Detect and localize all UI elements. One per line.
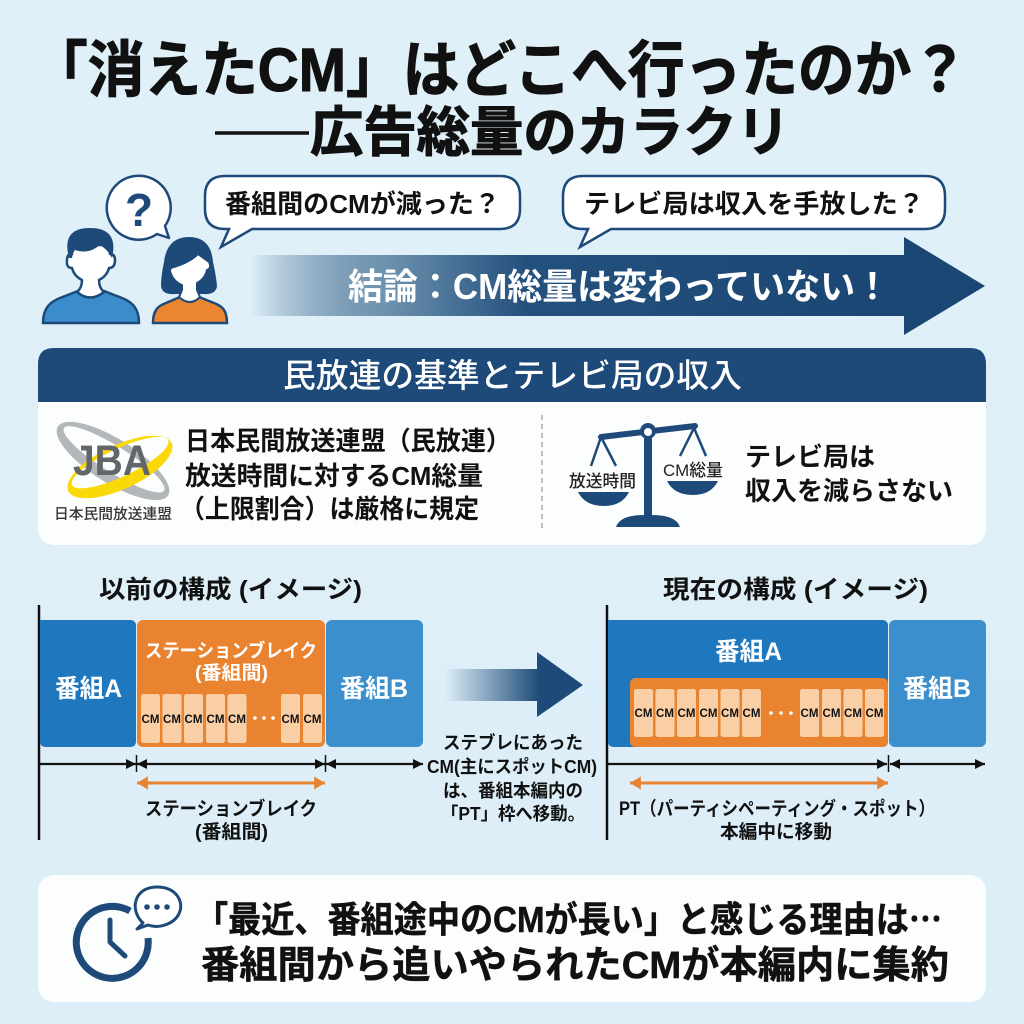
station break block: (番組間) xyxy=(195,662,268,684)
PT block xyxy=(630,678,888,747)
chart: before timeline xyxy=(39,605,423,843)
panel: bottom summary xyxy=(38,875,986,1002)
orange span arrow xyxy=(630,782,888,784)
text: JBA rule: （上限割合）は厳格に規定 xyxy=(180,494,479,524)
text: summary: 番組間から追いやられたCMが本編内に集約 xyxy=(201,945,949,987)
program B block: 番組B xyxy=(903,675,971,703)
arrow: transition xyxy=(445,652,583,717)
CM tiles: CM xyxy=(282,714,299,726)
title: 広告総量のカラクリ xyxy=(310,103,790,163)
speech bubble: revenue question: テレビ局は収入を手放した？ xyxy=(584,189,924,219)
text: JBA rule: 日本民間放送連盟（民放連） xyxy=(185,426,511,456)
icon: JBA logo xyxy=(46,408,181,523)
text: revenue not reduced xyxy=(745,442,953,506)
station break block: ステーションブレイク xyxy=(145,639,317,662)
time arrows xyxy=(40,755,423,772)
program B block: 番組B xyxy=(340,675,408,703)
text: explanation of move xyxy=(427,732,597,824)
text: explanation of move: CM(主にスポットCM) xyxy=(427,756,597,777)
orange span arrow xyxy=(137,782,325,784)
CM tiles xyxy=(141,694,322,743)
caption: station break xyxy=(145,797,317,843)
title: 「消えたCM」はどこへ行ったのか？ xyxy=(31,36,968,104)
panel header xyxy=(38,348,986,402)
time arrows xyxy=(608,755,985,772)
CM tiles: CM xyxy=(743,708,760,720)
icon: question bubble xyxy=(107,176,171,240)
caption: PT: 本編中に移動 xyxy=(720,821,832,843)
icon: man xyxy=(43,228,139,323)
CM tiles: CM xyxy=(228,714,246,726)
panel: JBA standard and revenue xyxy=(38,348,986,545)
CM tiles xyxy=(634,689,884,737)
CM tiles: CM xyxy=(304,714,321,726)
program B block xyxy=(889,620,986,747)
icon: balance scale: CM総量 xyxy=(663,461,723,480)
icon: question bubble: ? xyxy=(125,184,153,236)
chart: current timeline xyxy=(607,605,986,843)
station break block xyxy=(137,620,325,747)
text: summary: 「最近、番組途中のCMが長い」と感じる理由は… xyxy=(195,891,942,943)
speech bubble: CM decrease question xyxy=(205,176,520,247)
program A block xyxy=(40,620,136,747)
CM tiles: CM xyxy=(142,714,159,726)
arrow: conclusion: 結論：CM総量は変わっていない！ xyxy=(348,266,890,307)
CM tiles: CM xyxy=(185,714,202,726)
program A block: 番組A xyxy=(55,675,122,703)
speech bubble: CM decrease question: 番組間のCMが減った？ xyxy=(225,189,500,219)
caption: PT: PT（パーティシペーティング・スポット） xyxy=(619,797,935,820)
icon: woman xyxy=(153,237,227,323)
CM tiles: CM xyxy=(823,708,840,720)
icon: two people wondering xyxy=(43,176,227,323)
icon: clock with speech bubble xyxy=(76,887,181,978)
caption: PT xyxy=(619,797,935,843)
text: revenue not reduced: テレビ局は xyxy=(745,442,875,472)
CM tiles: CM xyxy=(678,708,695,720)
caption: station break: ステーションブレイク xyxy=(145,797,317,820)
CM tiles: CM xyxy=(801,708,818,720)
speech bubble: revenue question xyxy=(563,176,945,247)
text: explanation of move: ステブレにあった xyxy=(443,732,583,753)
heading: before structure: 以前の構成 (イメージ) xyxy=(99,576,362,604)
icon: JBA logo: 日本民間放送連盟 xyxy=(54,506,172,523)
text: JBA rule xyxy=(180,426,511,524)
caption: station break: (番組間) xyxy=(195,821,268,843)
CM tiles: CM xyxy=(700,708,717,720)
CM tiles: CM xyxy=(721,708,739,720)
CM tiles: CM xyxy=(866,708,883,720)
program A block: 番組A xyxy=(715,638,782,666)
CM tiles: CM xyxy=(207,714,224,726)
text: summary xyxy=(195,891,949,987)
text: revenue not reduced: 収入を減らさない xyxy=(745,476,953,506)
text: JBA rule: 放送時間に対するCM総量 xyxy=(185,461,483,491)
panel header: 民放連の基準とテレビ局の収入 xyxy=(283,357,742,394)
program A block xyxy=(608,620,888,747)
CM tiles: CM xyxy=(163,714,181,726)
icon: JBA logo: JBA xyxy=(73,437,151,485)
icon: balance scale xyxy=(569,423,723,527)
CM tiles: CM xyxy=(844,708,862,720)
arrow: conclusion xyxy=(250,237,985,335)
icon: balance scale: 放送時間 xyxy=(569,472,636,491)
CM tiles: CM xyxy=(635,708,652,720)
program B block xyxy=(326,620,423,747)
text: explanation of move: 「PT」枠へ移動。 xyxy=(441,804,585,824)
text: explanation of move: は、番組本編内の xyxy=(443,781,583,801)
CM tiles: CM xyxy=(656,708,674,720)
heading: current structure: 現在の構成 (イメージ) xyxy=(663,576,928,604)
title xyxy=(31,36,968,163)
